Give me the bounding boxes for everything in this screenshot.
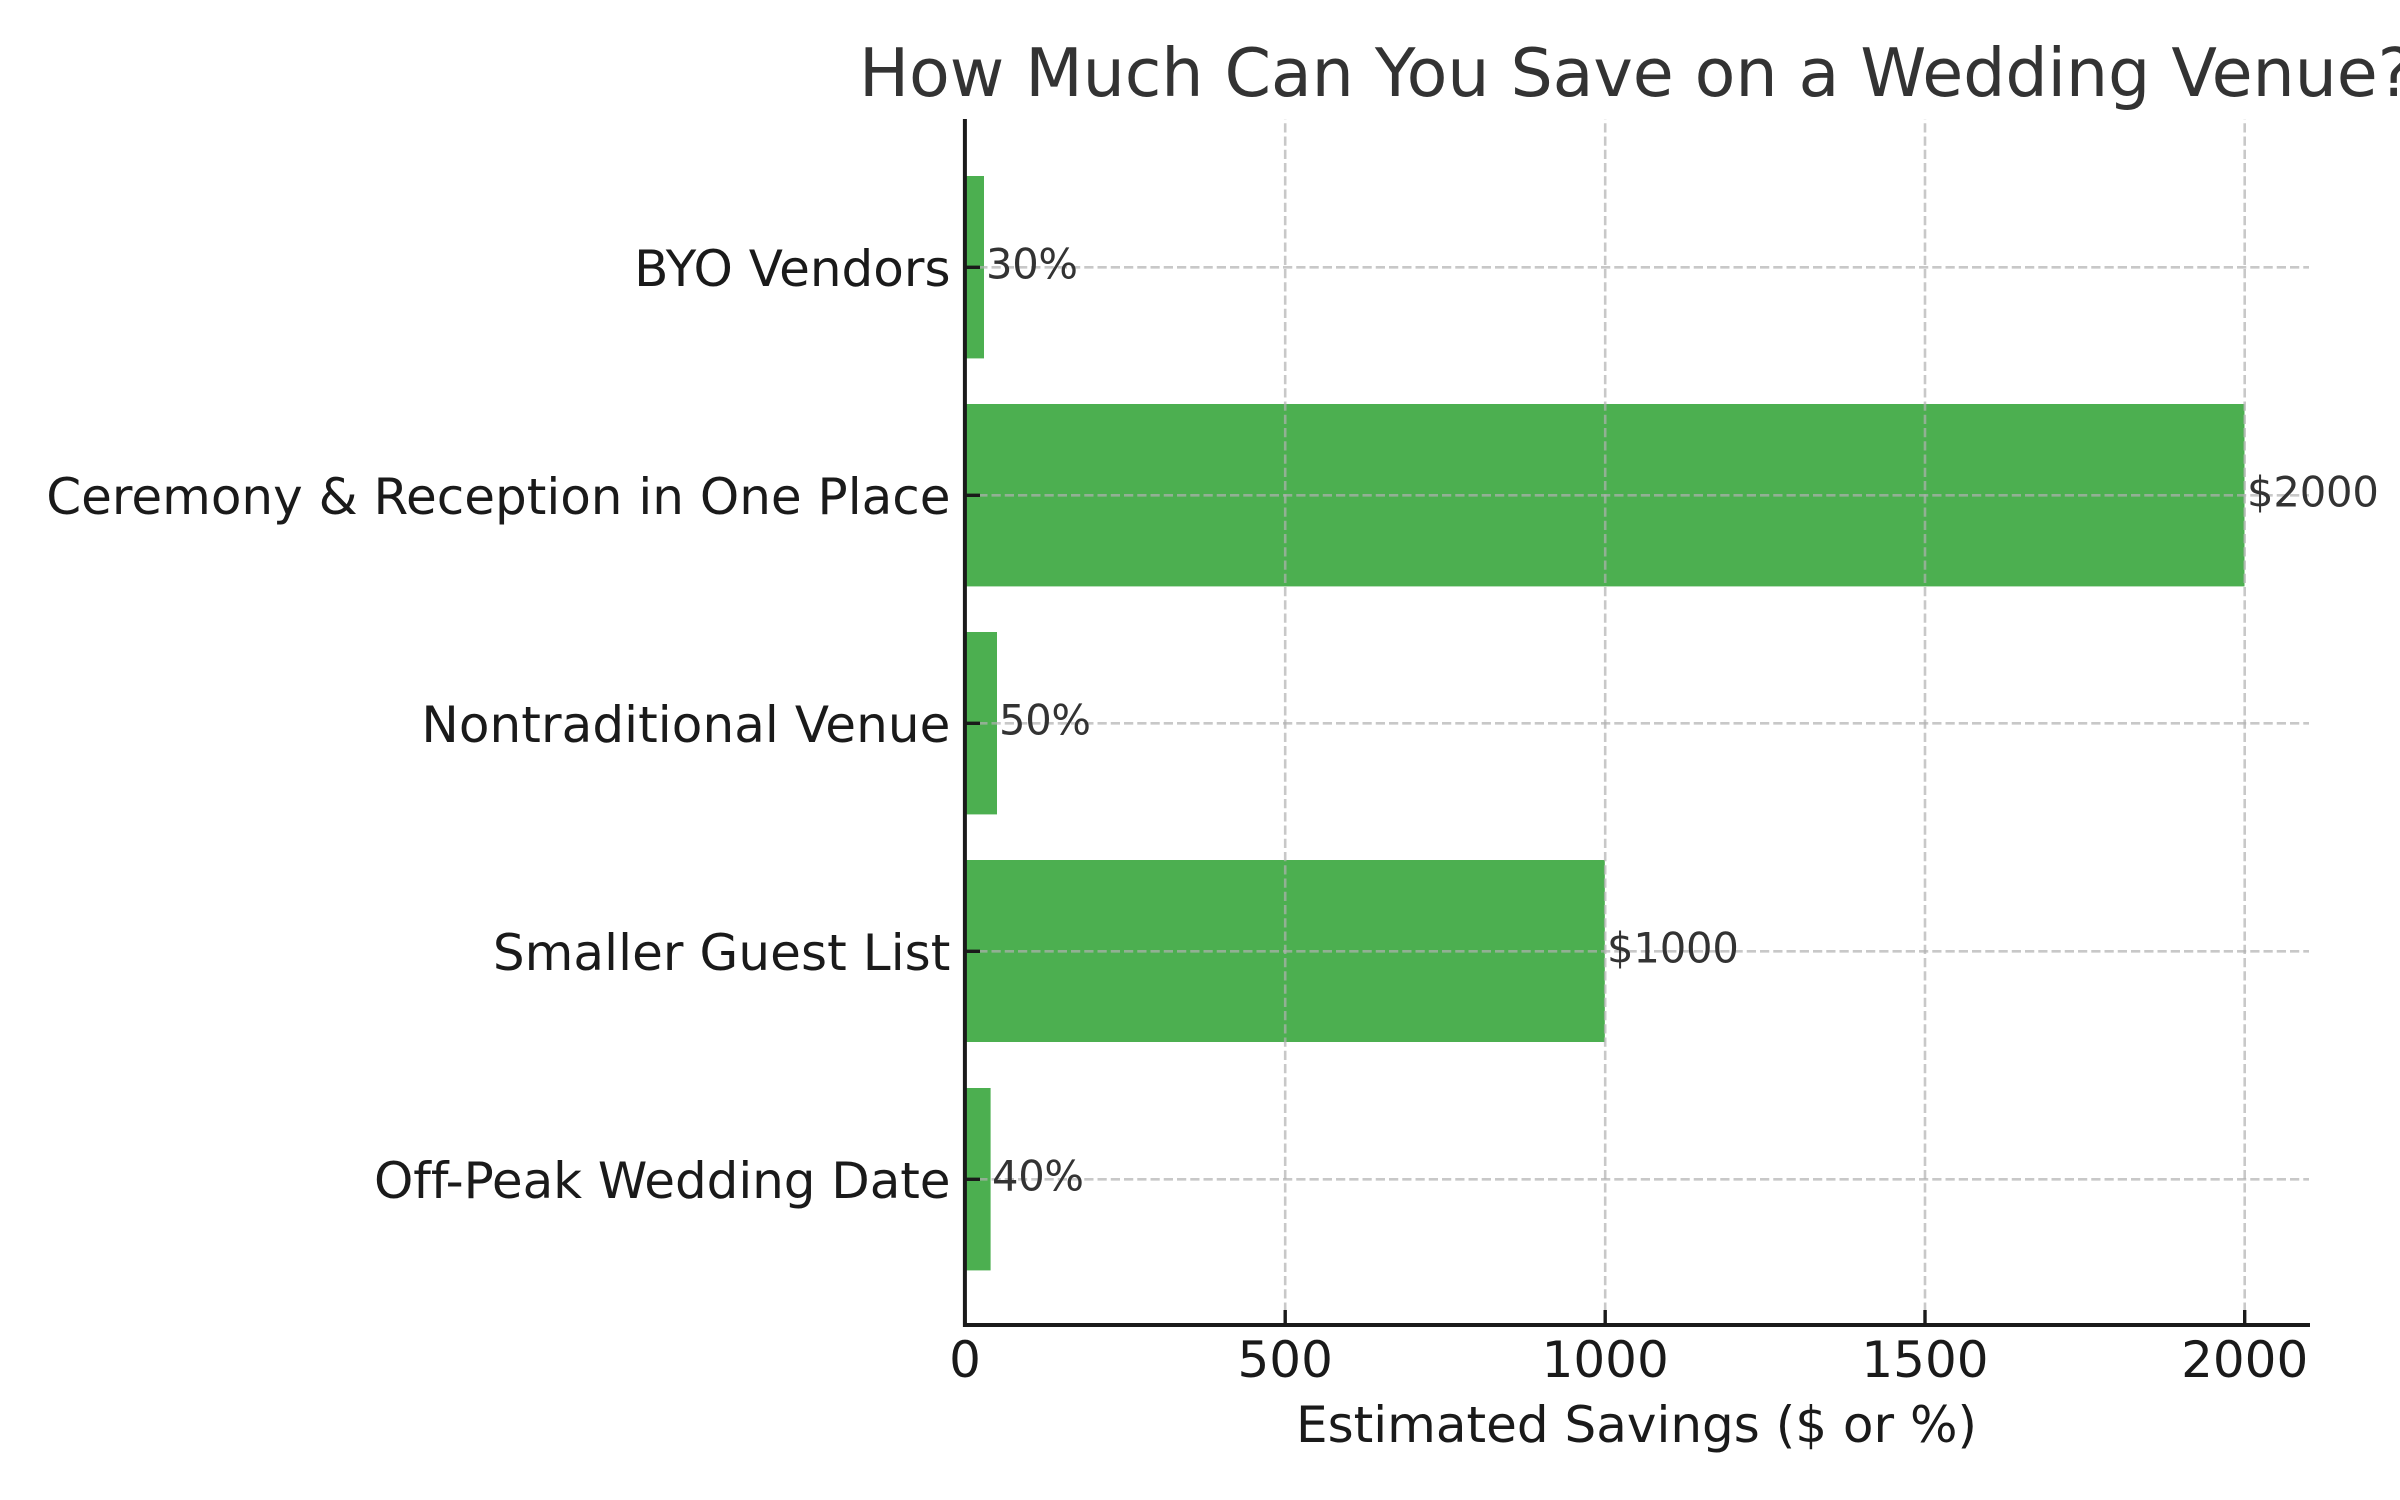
- x-axis tick labels: 1000: [1542, 1331, 1669, 1389]
- bars: [965, 176, 2244, 1270]
- y-axis category labels: Off-Peak Wedding Date: [374, 1152, 950, 1210]
- y-axis category labels: Ceremony & Reception in One Place: [46, 468, 950, 526]
- value labels: 40%: [992, 1152, 1084, 1201]
- x-axis tick labels: 0: [949, 1331, 981, 1389]
- bar: Off-Peak Wedding Date: [965, 1088, 991, 1270]
- value labels: 30%: [986, 240, 1078, 289]
- tick marks: [965, 267, 2245, 1325]
- grid lines: [965, 119, 2309, 1325]
- value labels: $2000: [2247, 468, 2379, 517]
- x-axis tick labels: 500: [1237, 1331, 1333, 1389]
- x-axis tick labels: 1500: [1861, 1331, 1989, 1389]
- x-axis title: Estimated Savings ($ or %): [1296, 1396, 1977, 1454]
- value labels: $1000: [1607, 924, 1739, 973]
- value labels: [986, 240, 2379, 1201]
- axis spines: [963, 119, 2310, 1327]
- bar: Ceremony & Reception in One Place: [965, 404, 2244, 586]
- y-axis category labels: Nontraditional Venue: [421, 696, 950, 754]
- x-axis tick labels: 2000: [2181, 1331, 2308, 1389]
- value labels: 50%: [999, 696, 1091, 745]
- bar: Nontraditional Venue: [965, 632, 997, 814]
- y-axis category labels: BYO Vendors: [634, 240, 950, 298]
- y-axis category labels: [46, 240, 950, 1210]
- x-axis tick labels: [949, 1331, 2308, 1389]
- bar: BYO Vendors: [965, 176, 984, 358]
- y-axis category labels: Smaller Guest List: [493, 924, 950, 982]
- bar: Smaller Guest List: [965, 860, 1605, 1042]
- title: How Much Can You Save on a Wedding Venue?: [859, 34, 2400, 112]
